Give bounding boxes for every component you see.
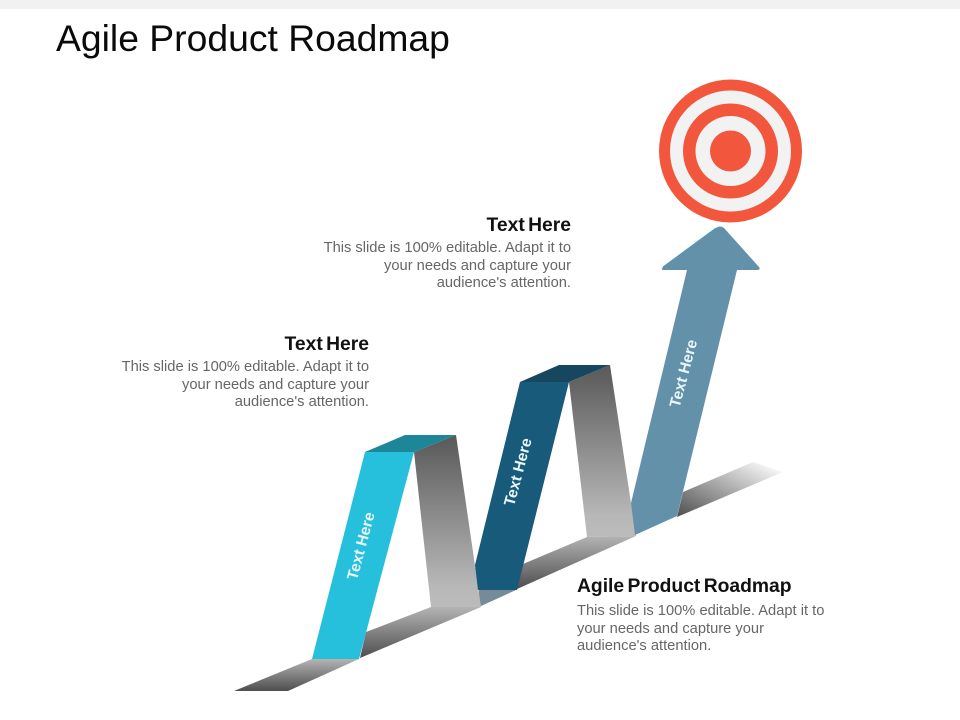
text block: left: your needs and capture your	[182, 377, 369, 393]
text block: left: Text Here	[285, 334, 369, 355]
text block: left: This slide is 100% editable. Adapt it to	[122, 359, 369, 375]
text block: upper: Text Here	[487, 215, 571, 236]
text block: bottom: your needs and capture your	[577, 621, 764, 637]
title: Agile Product Roadmap	[56, 17, 450, 59]
first fold: cyan band	[312, 435, 481, 659]
top strip	[0, 0, 960, 9]
text block: left	[122, 334, 369, 410]
text block: left: audience's attention.	[235, 394, 369, 410]
label: first band: Text Here	[344, 510, 379, 582]
text block: upper: your needs and capture your	[384, 258, 571, 274]
text block: bottom: Agile Product Roadmap	[577, 576, 792, 597]
text block: upper: This slide is 100% editable. Adapt it to	[324, 240, 571, 256]
arrow	[631, 226, 760, 535]
label: arrow: Text Here	[667, 338, 701, 409]
floor ribbon	[234, 462, 783, 691]
target icon	[659, 80, 802, 222]
text block: bottom	[577, 576, 824, 654]
label: second band: Text Here	[501, 436, 536, 508]
text block: bottom: This slide is 100% editable. Adapt it to	[577, 603, 824, 619]
text block: upper: audience's attention.	[437, 275, 571, 291]
text block: bottom: audience's attention.	[577, 638, 711, 654]
text block: upper	[324, 215, 571, 291]
second fold: navy band	[475, 365, 636, 590]
